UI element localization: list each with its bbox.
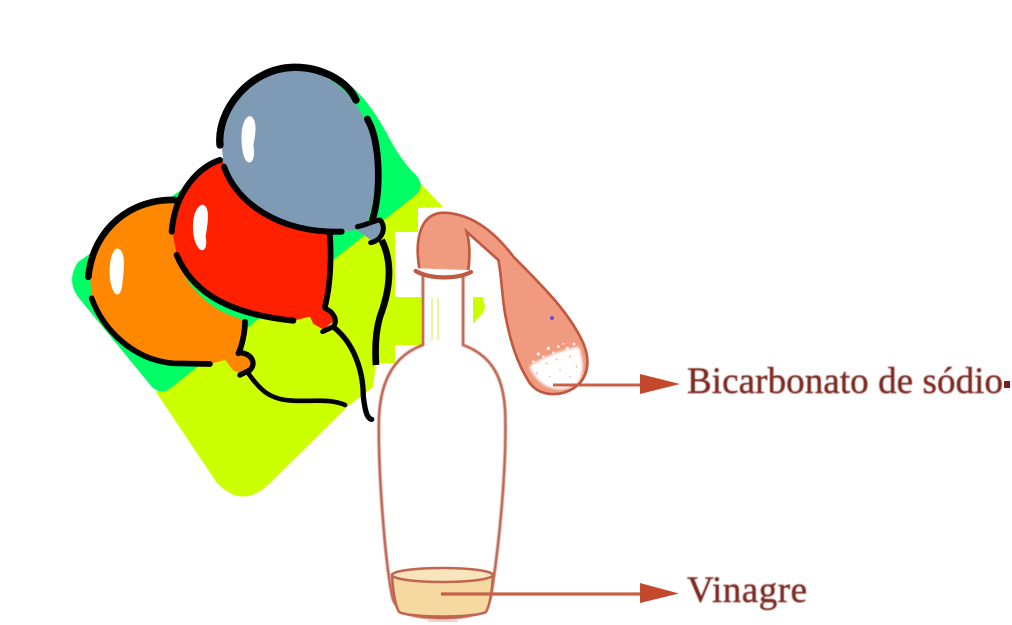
background: green diamond [72, 80, 421, 392]
balloon rim [416, 271, 471, 277]
deflated balloon with baking soda [416, 213, 587, 394]
marks: faint lines in the bottle neck [432, 298, 438, 340]
balloons [88, 67, 389, 419]
balloon: red [172, 160, 372, 419]
vinegar liquid [392, 568, 493, 621]
balloon: orange [88, 200, 345, 405]
mark: small square after the label [1004, 381, 1010, 388]
arrow: baking soda [553, 374, 680, 394]
bottle [379, 276, 505, 618]
arrow: vinegar [441, 583, 679, 603]
balloon outline [418, 213, 587, 394]
blue dot [550, 316, 554, 320]
background: yellow diamond [156, 183, 443, 496]
label: vinegar: Vinagre [687, 570, 807, 611]
label: baking soda: Bicarbonato de sódio [687, 361, 1003, 402]
balloon: blue-gray [220, 67, 389, 365]
baking soda powder [529, 343, 583, 389]
speck: yellow fragment beside the neck [473, 297, 485, 324]
